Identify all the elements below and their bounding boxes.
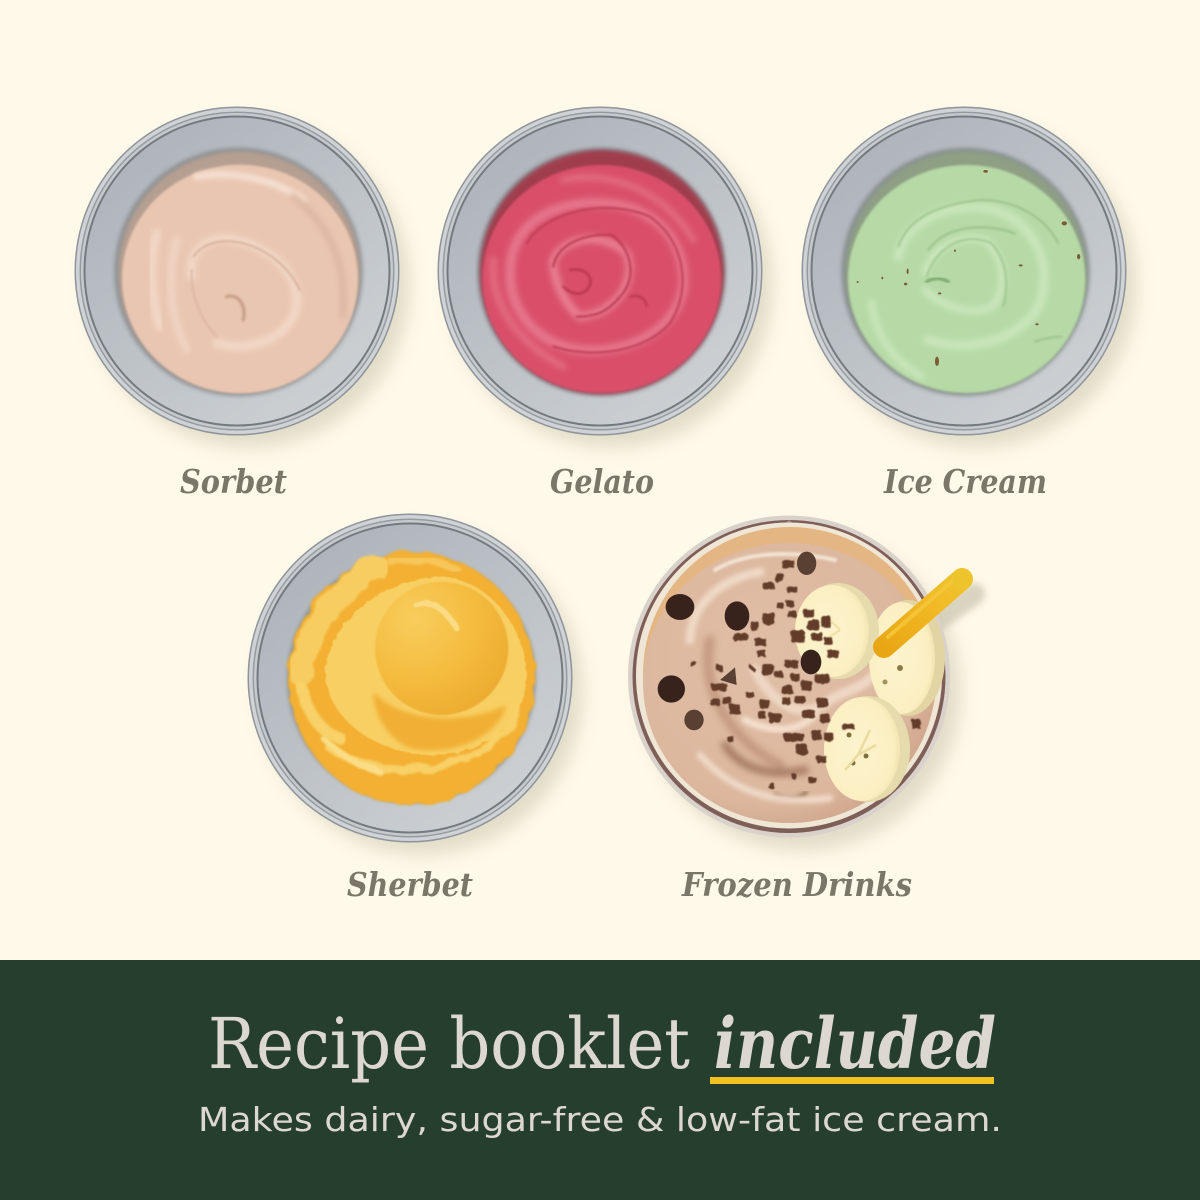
pistachio flecks (857, 170, 1080, 366)
sherbet, drawn in crop coordinates (288, 552, 535, 805)
banana slice, rear (869, 600, 945, 716)
pistachio ice cream surface (848, 165, 1085, 393)
milkshake body (643, 543, 935, 823)
panel: frozen drink glass (628, 516, 974, 850)
straw shadow (890, 594, 974, 654)
scoop dome (375, 582, 508, 715)
well interior (845, 151, 1087, 393)
panel: footer banner (0, 960, 1200, 1200)
caramel layer (643, 527, 937, 821)
panel: ice cream tub (802, 106, 1136, 447)
bottom ridges (330, 712, 517, 770)
sorbet scoop surface (122, 165, 358, 393)
well interior (118, 151, 360, 393)
label: Frozen Drinks: Frozen Drinks (681, 865, 912, 904)
gelato scoop surface (482, 165, 721, 393)
banana slice, front (824, 696, 910, 802)
sherbet base (288, 552, 535, 805)
panel: gelato tub (438, 106, 772, 447)
label: Ice Cream: Ice Cream (883, 462, 1047, 501)
heading: Recipe booklet (208, 1003, 690, 1085)
panel: sorbet tub (74, 106, 409, 447)
upper left lumpy band (302, 567, 377, 675)
label: Sherbet: Sherbet (347, 865, 473, 904)
yellow underline (710, 1077, 994, 1084)
well interior (480, 150, 724, 394)
yellow straw (884, 569, 972, 647)
panel: sherbet tub (248, 514, 582, 854)
chocolate chips and crumbs (658, 552, 921, 789)
subheading: Makes dairy, sugar-free & low-fat ice cream. (198, 1100, 1002, 1139)
label: Gelato: Gelato (550, 462, 654, 501)
drink shadow (644, 534, 960, 850)
lower scoop band (373, 692, 507, 750)
banana slice, top (795, 583, 879, 679)
light scoop crescent (325, 577, 527, 755)
swirl highlights (690, 554, 880, 800)
label: Sorbet: Sorbet (180, 462, 287, 501)
glass rim (628, 516, 950, 838)
heading: included (714, 1002, 996, 1085)
heading (208, 1002, 996, 1085)
